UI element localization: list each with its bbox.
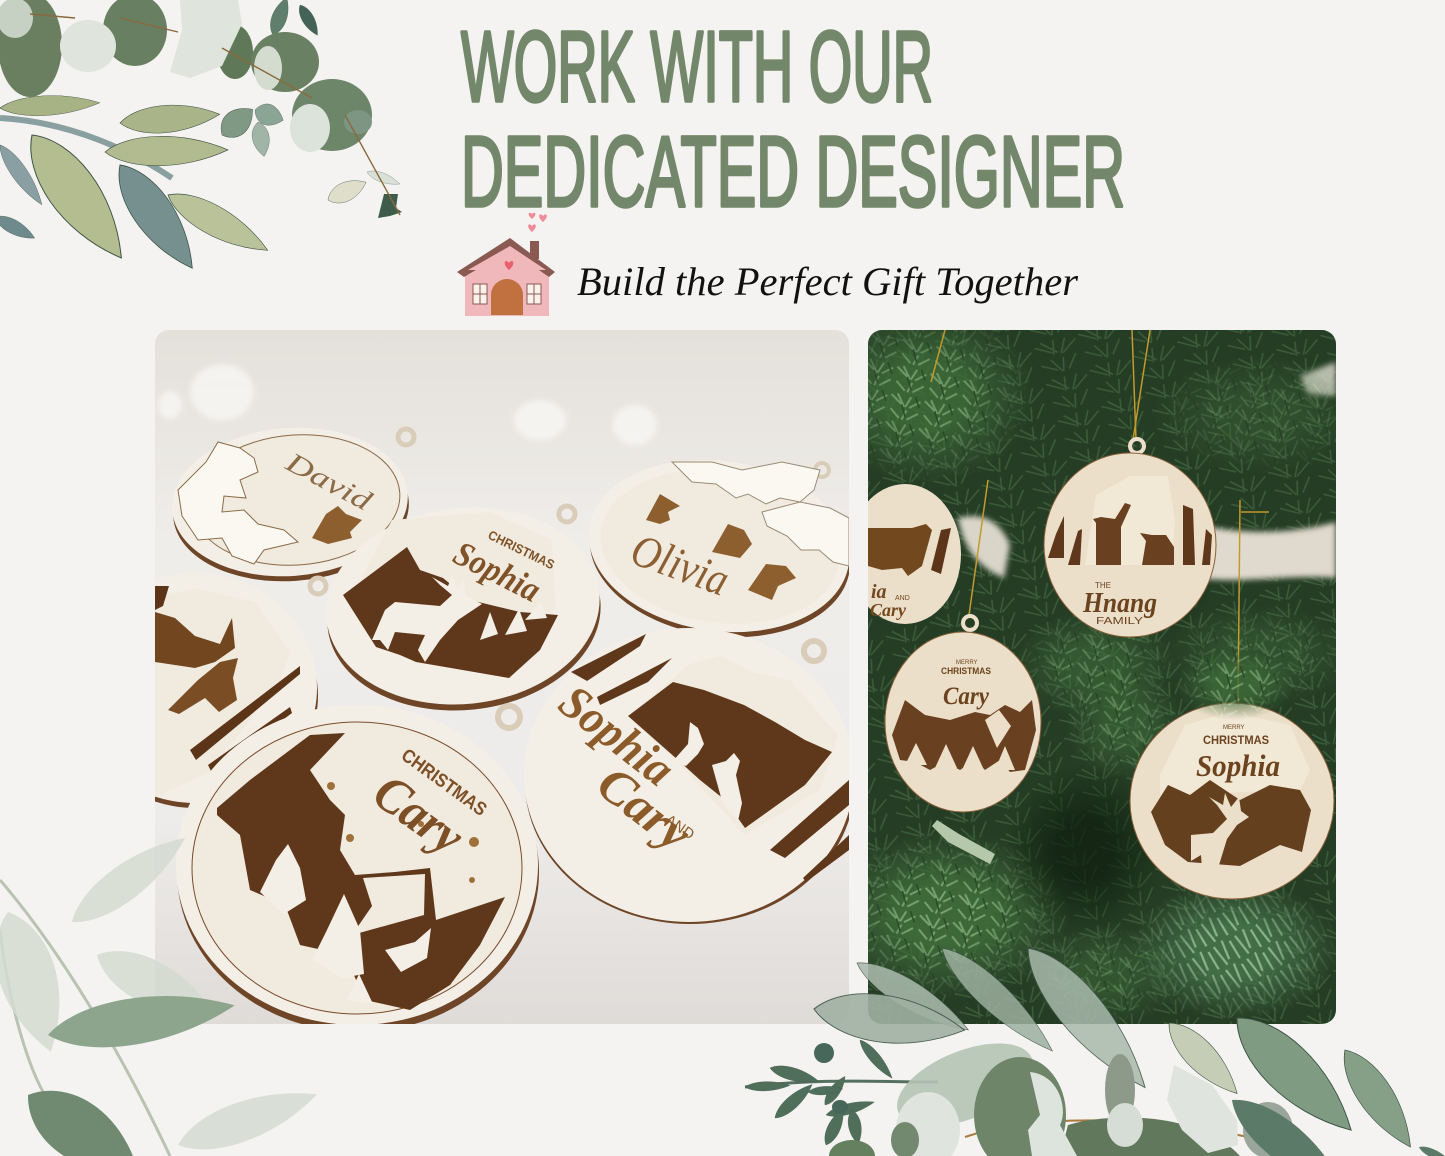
foliage: bottom right eucalyptus bbox=[745, 934, 1445, 1156]
ornament: left clipped: ia bbox=[871, 581, 887, 603]
ornament: Huang family: Hnang bbox=[1082, 588, 1157, 619]
foliage: top left eucalyptus bbox=[0, 0, 402, 279]
ornament: Sophia and Cary with rabbits: AND bbox=[662, 811, 698, 844]
panel: ornaments on Christmas tree photo bbox=[815, 305, 1370, 1025]
ornament: Sophia and Cary with rabbits: Sophia bbox=[549, 675, 684, 797]
ornament: Huang family: THE bbox=[1095, 581, 1111, 590]
icon: pink house with hearts bbox=[457, 213, 555, 316]
ornament: left deer bbox=[155, 576, 328, 808]
ornament: Sophia stag bbox=[1130, 703, 1334, 899]
ornament: Sophia with stag: CHRISTMAS bbox=[486, 527, 557, 572]
ornament: Sophia with stag bbox=[327, 504, 601, 710]
foliage clusters bbox=[815, 305, 1370, 1025]
ornament: Cary tree: MERRY bbox=[956, 660, 978, 666]
ornament: Cary tree: CHRISTMAS bbox=[941, 666, 991, 677]
title: WORK WITH OUR bbox=[461, 11, 933, 123]
ornament: Cary tree: Cary bbox=[943, 683, 990, 710]
ornament: Cary with mountains: CHRISTMAS bbox=[397, 745, 490, 821]
foliage: bottom left pale leaves bbox=[0, 824, 324, 1156]
ornament: David bbox=[167, 420, 414, 589]
subtitle: Build the Perfect Gift Together bbox=[577, 259, 1078, 304]
ornament: Cary with mountains bbox=[176, 705, 539, 1032]
ornament: Sophia and Cary with rabbits bbox=[524, 628, 855, 924]
ornament: Sophia with stag: Sophia bbox=[447, 533, 547, 610]
ornament: David: David bbox=[280, 446, 378, 518]
ornament: Sophia stag: CHRISTMAS bbox=[1203, 733, 1269, 747]
ornament: Sophia stag: MERRY bbox=[1223, 725, 1245, 731]
ornament: Sophia and Cary with rabbits: Cary bbox=[587, 755, 703, 862]
ornament: left clipped bbox=[868, 484, 961, 624]
ornament: left clipped: AND bbox=[895, 595, 910, 602]
title bbox=[461, 11, 1125, 228]
ornament: Cary tree bbox=[885, 616, 1041, 812]
ornament: Cary with mountains: Cary bbox=[363, 764, 475, 867]
ornament: Olivia: Olivia bbox=[625, 523, 736, 606]
string light bbox=[932, 820, 995, 864]
ornament: Huang family: FAMILY bbox=[1096, 616, 1143, 627]
ornament: left clipped: Cary bbox=[870, 600, 907, 620]
panel: ornaments on counter photo bbox=[155, 330, 849, 1024]
ornament: Huang family bbox=[1044, 439, 1216, 637]
needles over Sophia ornament bbox=[1180, 652, 1290, 718]
ornament: Olivia bbox=[590, 460, 849, 637]
ornament: Sophia stag: Sophia bbox=[1196, 748, 1280, 783]
hanging strings bbox=[931, 330, 1269, 705]
background gaps in tree bbox=[958, 362, 1336, 580]
